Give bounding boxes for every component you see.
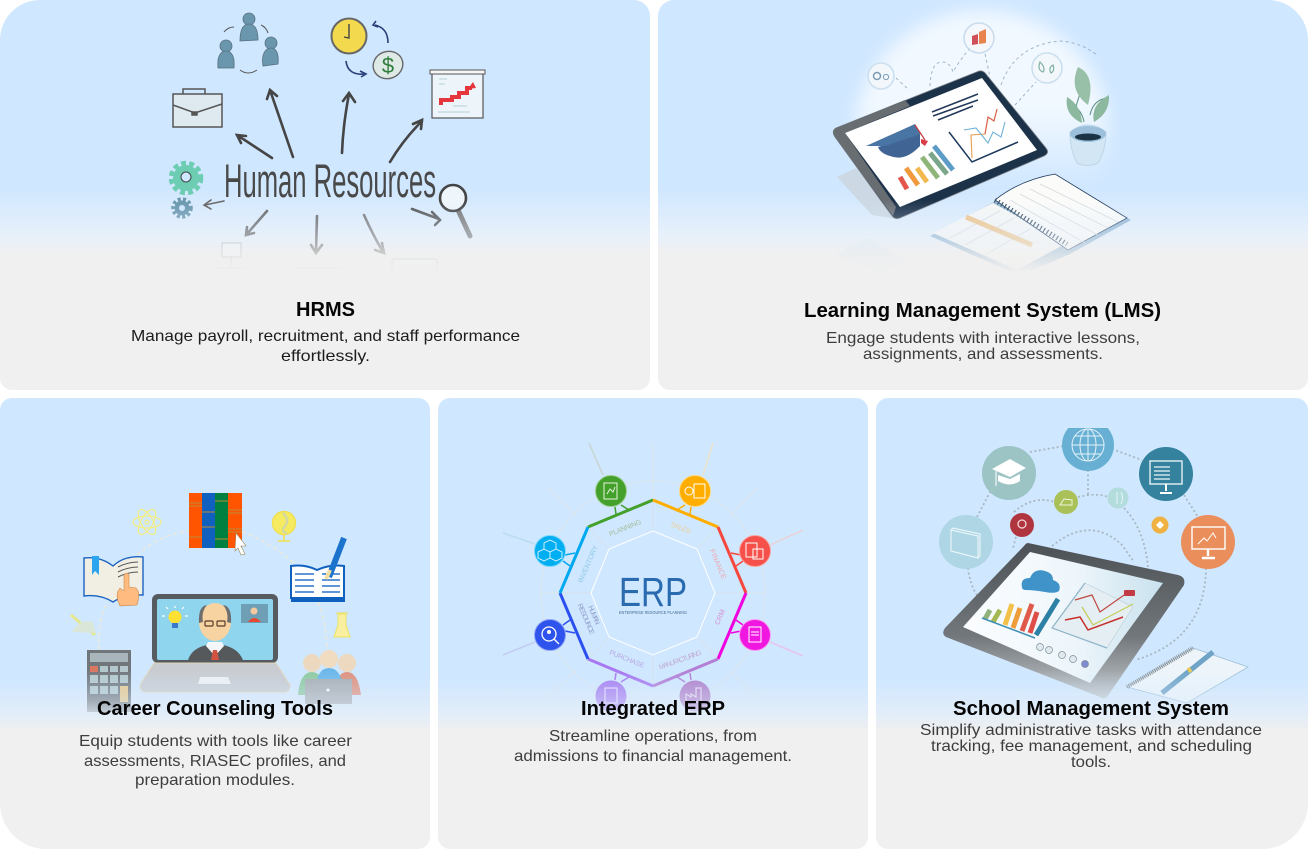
- description: ERP: Streamline operations, from: [549, 728, 757, 745]
- node: manufacturing: [680, 680, 710, 712]
- bar chart on tablet: [900, 146, 953, 189]
- illustration: tablet with connected services: [939, 419, 1248, 703]
- description: HRMS: [131, 328, 520, 365]
- rays and outer ring: [503, 443, 803, 705]
- video inset: [241, 604, 268, 623]
- icon: globe: [272, 512, 296, 541]
- heading: career: Career Counseling Tools: [97, 698, 333, 720]
- icon: atom: [133, 507, 161, 537]
- description: school: tracking, fee management, and scheduling: [931, 738, 1252, 755]
- segment labels: SALES: [670, 521, 692, 536]
- description: school: Simplify administrative tasks with attendance: [920, 722, 1262, 739]
- plant in pot: [1067, 67, 1109, 166]
- white glow behind tablet: [851, 4, 1113, 180]
- node: CRM: [740, 620, 770, 650]
- notebook with pen: [1127, 648, 1248, 703]
- dashed arcs: [99, 531, 327, 652]
- faded calculator: [835, 238, 910, 272]
- icon: clock and dollar: $: [382, 53, 394, 78]
- illustration: online counseling: [71, 493, 361, 712]
- node: inventory: [534, 536, 566, 566]
- description: ERP: [514, 728, 792, 765]
- panel background: HRMS: [0, 0, 650, 390]
- description: career: preparation modules.: [135, 772, 295, 789]
- icon: stack of books: [189, 493, 242, 548]
- icon: three students with laptop: [298, 650, 361, 704]
- description: LMS: [826, 330, 1140, 363]
- icon: light bulb: [162, 606, 188, 628]
- small icon circles: [1010, 488, 1168, 537]
- heading: school: School Management System: [953, 698, 1229, 720]
- icon: calculator: [87, 650, 131, 712]
- icon circle: bars: [964, 23, 994, 53]
- heading: LMS: Learning Management System (LMS): [804, 300, 1161, 322]
- segment labels: INVENTORY: [578, 544, 600, 584]
- icon: growth chart board: [430, 70, 485, 118]
- dotted network arcs: [968, 446, 1206, 660]
- icon: globe circle: [1062, 419, 1114, 471]
- panel background: LMS: [658, 0, 1308, 390]
- description: school: [920, 722, 1262, 771]
- open notebook: [930, 174, 1131, 276]
- panel background: ERP: [438, 398, 868, 849]
- line chart on tablet: [1052, 583, 1135, 648]
- icon: clock and dollar: [332, 18, 407, 83]
- panel background: school: [876, 398, 1308, 849]
- panel background: career: [0, 398, 430, 849]
- node: finance: [740, 536, 770, 566]
- icon: protractor: [71, 615, 96, 635]
- text lines on tablet: [932, 94, 978, 120]
- ERP logo text: ENTERPRISE RESOURCE PLANNING: [619, 610, 687, 615]
- arrows: [204, 90, 440, 253]
- laptop: [140, 594, 290, 692]
- description: LMS: assignments, and assessments.: [863, 346, 1103, 363]
- heading: HRMS: HRMS: [296, 299, 355, 321]
- tablet body: [833, 71, 1048, 219]
- connector lines: [896, 41, 1097, 105]
- line chart on tablet: [949, 109, 1018, 162]
- segment labels: CRM: [714, 609, 727, 626]
- description: career: Equip students with tools like career: [79, 733, 353, 750]
- description: LMS: Engage students with interactive lessons,: [826, 330, 1140, 347]
- inner octagon: [591, 531, 715, 655]
- tablet stand: [837, 168, 896, 219]
- counselor: [188, 603, 243, 660]
- icon: monitor circle: [1139, 447, 1193, 501]
- icon: box circle: [939, 515, 993, 569]
- panel: Integrated ERP: [438, 398, 868, 849]
- icon: orange monitor circle: [1181, 515, 1235, 569]
- icon: graduation cap circle: [982, 446, 1036, 500]
- icons: faded org chart and news: [222, 242, 438, 265]
- description: HRMS: Manage payroll, recruitment, and staff performance: [131, 328, 520, 345]
- segment labels: RESOURCE: [576, 603, 595, 636]
- outer octagon segments: [560, 500, 746, 686]
- icon: notebook and pencil: [291, 538, 345, 602]
- heading: ERP: Integrated ERP: [581, 698, 725, 720]
- icon: three people cycle: [218, 13, 278, 73]
- segment labels: [576, 519, 727, 672]
- segment labels: MANUFACTURING: [658, 650, 703, 672]
- ERP logo text: ERP: [619, 569, 687, 615]
- icon: magnifier: [440, 185, 470, 236]
- hand-lettered title: Human Resources: [224, 154, 436, 207]
- icon: flask: [334, 613, 350, 637]
- node: sales: [680, 476, 710, 506]
- segment labels: PLANNING: [608, 519, 643, 538]
- icon: cursor: [235, 533, 246, 555]
- illustration: tablet, plant and notebook: [833, 10, 1131, 276]
- node: human resource: [534, 620, 566, 650]
- description: HRMS: effortlessly.: [281, 348, 370, 365]
- tablet screen: [845, 78, 1037, 207]
- icon: gears: [171, 163, 201, 217]
- connector stems: [563, 505, 743, 682]
- segment labels: PURCHASE: [608, 649, 645, 670]
- panel: Learning Management System: [658, 0, 1308, 390]
- panel: School Management System: [876, 398, 1308, 849]
- icon circle: leaves: [1032, 53, 1062, 83]
- panel: HRMS: [0, 0, 650, 390]
- panel: Career Counseling Tools: [0, 398, 430, 849]
- bar chart on tablet: [982, 599, 1058, 638]
- description: career: [79, 733, 353, 789]
- description: school: tools.: [1071, 754, 1111, 771]
- description: career: assessments, RIASEC profiles, and: [84, 753, 346, 770]
- laptop base: [140, 663, 290, 692]
- ERP wheel diagram: [503, 443, 803, 712]
- tablet device: [943, 543, 1184, 698]
- graduation cap: [866, 124, 928, 158]
- icon: briefcase: [173, 89, 222, 127]
- app icons on tablet: [1036, 644, 1088, 668]
- segment labels: HUMAN: [586, 605, 601, 626]
- description: ERP: admissions to financial management.: [514, 748, 792, 765]
- node: planning: [596, 476, 626, 506]
- node: purchase: [596, 680, 626, 712]
- segment labels: FINANCE: [708, 548, 727, 581]
- illustration: human resources sketch: [171, 13, 485, 275]
- cloud icon: [1022, 570, 1060, 593]
- icon circle: gears: [868, 63, 894, 89]
- icon: open book with hand: [84, 556, 143, 606]
